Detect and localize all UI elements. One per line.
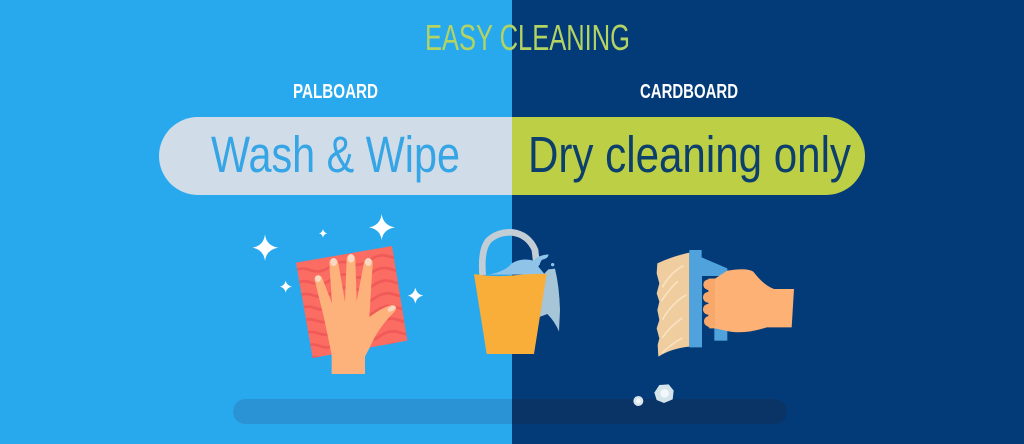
icon: hand — [315, 254, 397, 374]
icon: sparkles — [252, 214, 423, 304]
background: cardboard side — [512, 0, 1024, 444]
illustration: wiping hand and bucket — [252, 214, 560, 374]
icon: brush bristles — [657, 253, 689, 357]
icon: bucket — [474, 232, 560, 354]
background: palboard side — [0, 0, 512, 444]
icon: fist — [703, 269, 794, 332]
heading: cardboard: CARDBOARD — [640, 81, 738, 103]
comparison pill — [159, 117, 865, 195]
title: EASY CLEANING — [425, 17, 630, 58]
bottom shadow bar — [233, 399, 787, 424]
icon: crumbs — [633, 384, 674, 406]
pill: dry cleaning only — [512, 117, 865, 195]
pill: dry cleaning only: Dry cleaning only — [528, 126, 851, 183]
illustration: brushing hand and crumbs — [633, 250, 794, 406]
icon: red cloth — [296, 246, 408, 358]
icon: brush handle — [689, 250, 727, 347]
pill: wash and wipe — [159, 117, 512, 195]
heading: palboard: PALBOARD — [293, 81, 378, 103]
pill: wash and wipe: Wash & Wipe — [211, 126, 460, 183]
